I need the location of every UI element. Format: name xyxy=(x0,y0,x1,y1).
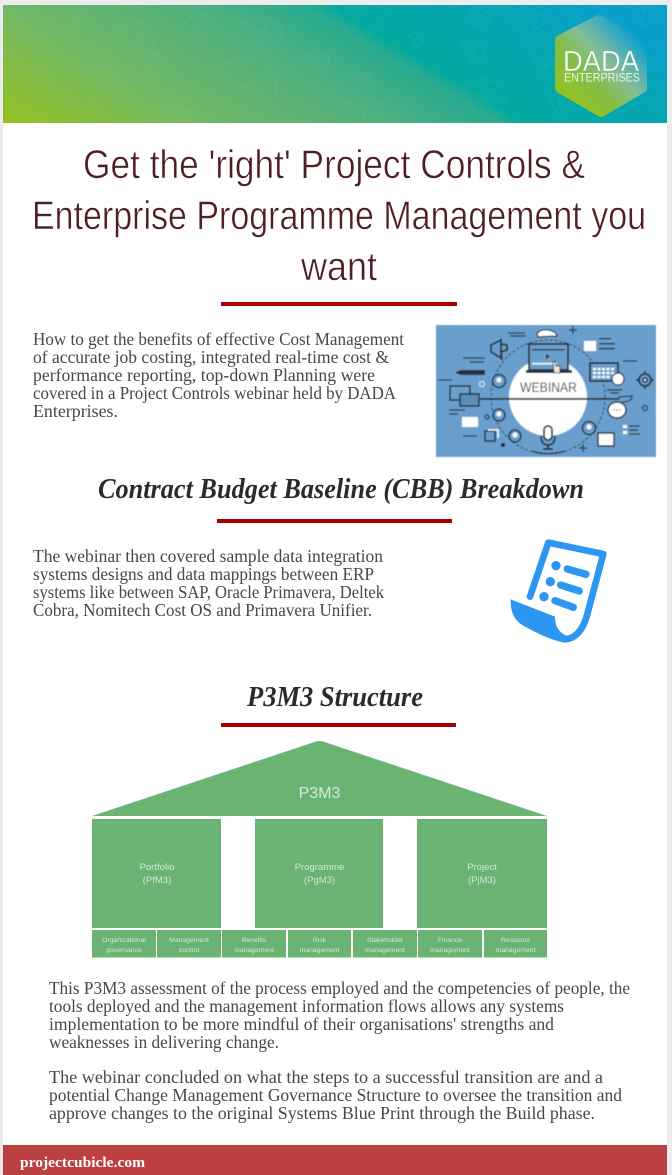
foundation row: management xyxy=(300,947,339,954)
body text: conclusion: approve changes to the original Systems Blue Print through the Build phase. xyxy=(49,1103,595,1123)
webinar illustration: WEBINAR xyxy=(520,379,577,395)
foundation row: Organizational xyxy=(102,937,146,944)
webinar illustration xyxy=(436,325,656,457)
title: want xyxy=(300,245,377,289)
body text: assessment: tools deployed and the management information flows allows any systems xyxy=(49,996,564,1016)
intro text: Enterprises. xyxy=(33,401,118,421)
icon: target xyxy=(636,371,654,389)
small dashes and marks xyxy=(438,326,648,454)
body text: data integration: systems designs and data mappings between ERP xyxy=(33,564,374,584)
foundation row: Benefits xyxy=(242,937,267,944)
icon: squares xyxy=(485,430,498,441)
heading: P3M3 Structure: P3M3 Structure xyxy=(246,682,423,713)
title: Get the 'right' Project Controls & xyxy=(83,143,585,187)
body text: conclusion xyxy=(49,1067,622,1123)
icon: pen xyxy=(455,370,485,375)
foundation row: management xyxy=(365,947,405,954)
body text: data integration: systems like between SAP, Oracle Primavera, Deltek xyxy=(33,582,384,602)
icon: cloud xyxy=(537,330,557,337)
icon: video card xyxy=(462,417,478,427)
logo: DADA Enterprises: ENTERPRISES xyxy=(564,72,640,84)
icon: laptop xyxy=(526,344,572,373)
foundation row: Risk xyxy=(313,937,327,944)
title xyxy=(32,143,646,289)
foundation row xyxy=(92,930,547,958)
body text: data integration: The webinar then covered sample data integration xyxy=(33,546,383,566)
body text: data integration: Cobra, Nomitech Cost OS and Primavera Unifier. xyxy=(33,600,372,620)
footer bar xyxy=(3,1145,667,1175)
icon: microphone xyxy=(541,426,555,449)
roof: P3M3 xyxy=(92,741,547,816)
footer bar: projectcubicle.com xyxy=(20,1155,146,1171)
icon: document xyxy=(511,543,603,643)
icon: list xyxy=(623,425,640,434)
icon: thumbs up xyxy=(598,433,614,446)
icon: calendar and clock xyxy=(590,363,624,385)
foundation row: management xyxy=(430,947,470,954)
pillar: Portfolio: Portfolio xyxy=(140,862,174,873)
foundation row: governance xyxy=(106,947,142,954)
pillar: Programme xyxy=(255,819,383,928)
pillar: Project: (PjM3) xyxy=(468,875,496,886)
roof: P3M3: P3M3 xyxy=(299,785,340,802)
P3M3 house diagram xyxy=(92,741,547,958)
heading: Contract Budget Baseline: Contract Budget Baseline (CBB) Breakdown xyxy=(98,474,584,505)
foundation row: management xyxy=(496,947,535,954)
pillar: Project: Project xyxy=(467,862,497,873)
header banner xyxy=(0,0,667,129)
foundation row: control xyxy=(179,947,200,954)
pillar: Project xyxy=(417,819,547,928)
intro text: How to get the benefits of effective Cost Management xyxy=(33,329,404,349)
intro text: covered in a Project Controls webinar held by DADA xyxy=(33,383,396,403)
pillar: Programme: Programme xyxy=(295,862,344,873)
body text: data integration xyxy=(33,546,384,620)
body text: conclusion: The webinar concluded on what the steps to a successful transition are and a xyxy=(49,1067,603,1087)
pillar: Portfolio xyxy=(92,819,221,928)
foundation row: Management xyxy=(169,937,209,944)
foundation row: Finance xyxy=(438,937,462,944)
foundation row: Stakeholder xyxy=(367,937,404,944)
pillar: Portfolio: (PfM3) xyxy=(143,875,171,886)
icon: chat bubbles xyxy=(450,386,479,406)
icon: user circles xyxy=(492,374,596,442)
icon: puzzle and lines xyxy=(584,338,615,351)
body text: conclusion: potential Change Management Governance Structure to oversee the transition and xyxy=(49,1085,622,1105)
body text: assessment xyxy=(49,978,630,1052)
foundation row: management xyxy=(234,947,274,954)
body text: assessment: This P3M3 assessment of the process employed and the competencies of people, the xyxy=(49,978,630,998)
intro text: of accurate job costing, integrated real-time cost & xyxy=(33,347,389,367)
icon: megaphone xyxy=(491,340,507,360)
pillar: Programme: (PgM3) xyxy=(304,875,335,886)
logo: DADA Enterprises xyxy=(560,20,642,112)
body text: assessment: implementation to be more mindful of their organisations' strengths and xyxy=(49,1014,554,1034)
body text: assessment: weaknesses in delivering change. xyxy=(49,1032,279,1052)
logo: DADA Enterprises: DADA xyxy=(563,46,640,78)
icon: speech bubble xyxy=(608,396,632,418)
foundation row: Resource xyxy=(501,937,530,944)
intro text xyxy=(33,329,404,421)
intro text: performance reporting, top-down Planning were xyxy=(33,365,375,385)
